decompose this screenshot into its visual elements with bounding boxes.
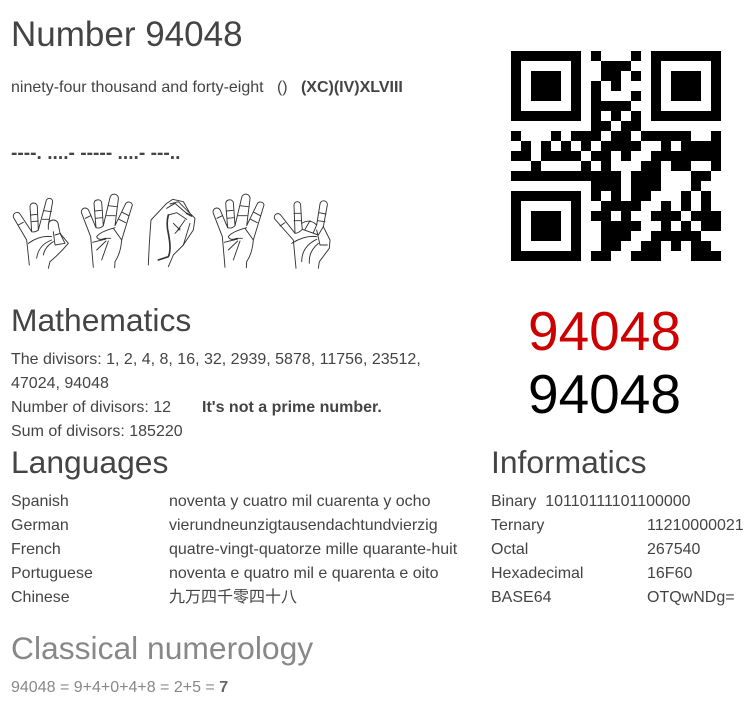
sum of divisors: Sum of divisors: 185220: [11, 423, 183, 440]
black number: 94048: [528, 363, 681, 425]
translations: vierundneunzigtausendachtundvierzig: [169, 517, 438, 534]
binary row: Binary 10110111101100000: [491, 493, 691, 510]
base names: Hexadecimal: [491, 565, 583, 582]
panel: informatics: [491, 444, 744, 606]
divisors list: 47024, 94048: [11, 375, 109, 392]
panel: classical numerology: [11, 630, 313, 696]
base names: Octal: [491, 541, 528, 558]
divisors list: The divisors: 1, 2, 4, 8, 16, 32, 2939, 5878, 11756, 23512,: [11, 351, 421, 368]
base names: Ternary: [491, 517, 544, 534]
title: Number 94048: [11, 15, 243, 54]
language names: [11, 493, 93, 606]
panel: mathematics: It's not a prime number.: [202, 399, 382, 416]
heading: informatics: Informatics: [491, 444, 646, 480]
base values: [647, 517, 744, 606]
divisors list: [11, 351, 421, 392]
base values: 267540: [647, 541, 700, 558]
red number: 94048: [528, 300, 681, 362]
base values: 11210000021: [647, 517, 744, 534]
icon: hand sign 4: [81, 194, 132, 268]
panel: languages: [11, 444, 458, 606]
translations: 九万四千零四十八: [169, 589, 297, 606]
morse code: ----. ....- ----- ....- ---..: [11, 143, 180, 164]
number of divisors and prime note: Number of divisors: 12: [11, 399, 171, 416]
translations: quatre-vingt-quatorze mille quarante-huit: [169, 541, 457, 558]
icon: hand sign 8: [274, 201, 330, 268]
base values: OTQwNDg=: [647, 589, 735, 606]
base names: BASE64: [491, 589, 551, 606]
translations: noventa y cuatro mil cuarenta y ocho: [169, 493, 430, 510]
sign language hands: [12, 194, 330, 269]
base values: 16F60: [647, 565, 692, 582]
heading: languages: Languages: [11, 444, 168, 480]
heading: classical numerology: Classical numerology: [11, 630, 313, 666]
icon: hand sign 9: [13, 198, 68, 268]
language names: French: [11, 541, 61, 558]
language names: Spanish: [11, 493, 69, 510]
base names: [491, 517, 583, 606]
icon: hand sign 4 second: [213, 194, 264, 268]
number name and roman numeral: ninety-four thousand and forty-eight () (XC)(IV)XLVIII: [11, 79, 403, 96]
icon: hand sign 0: [148, 199, 195, 267]
numerology sum: 94048 = 9+4+0+4+8 = 2+5 = 7: [11, 679, 228, 696]
language names: Chinese: [11, 589, 70, 606]
QR code: [511, 51, 721, 261]
translations: [169, 493, 458, 606]
language names: German: [11, 517, 69, 534]
heading: mathematics: Mathematics: [11, 302, 191, 338]
language names: Portuguese: [11, 565, 93, 582]
panel: mathematics: [11, 302, 421, 440]
translations: noventa e quatro mil e quarenta e oito: [169, 565, 439, 582]
number of divisors and prime note: [11, 399, 382, 416]
